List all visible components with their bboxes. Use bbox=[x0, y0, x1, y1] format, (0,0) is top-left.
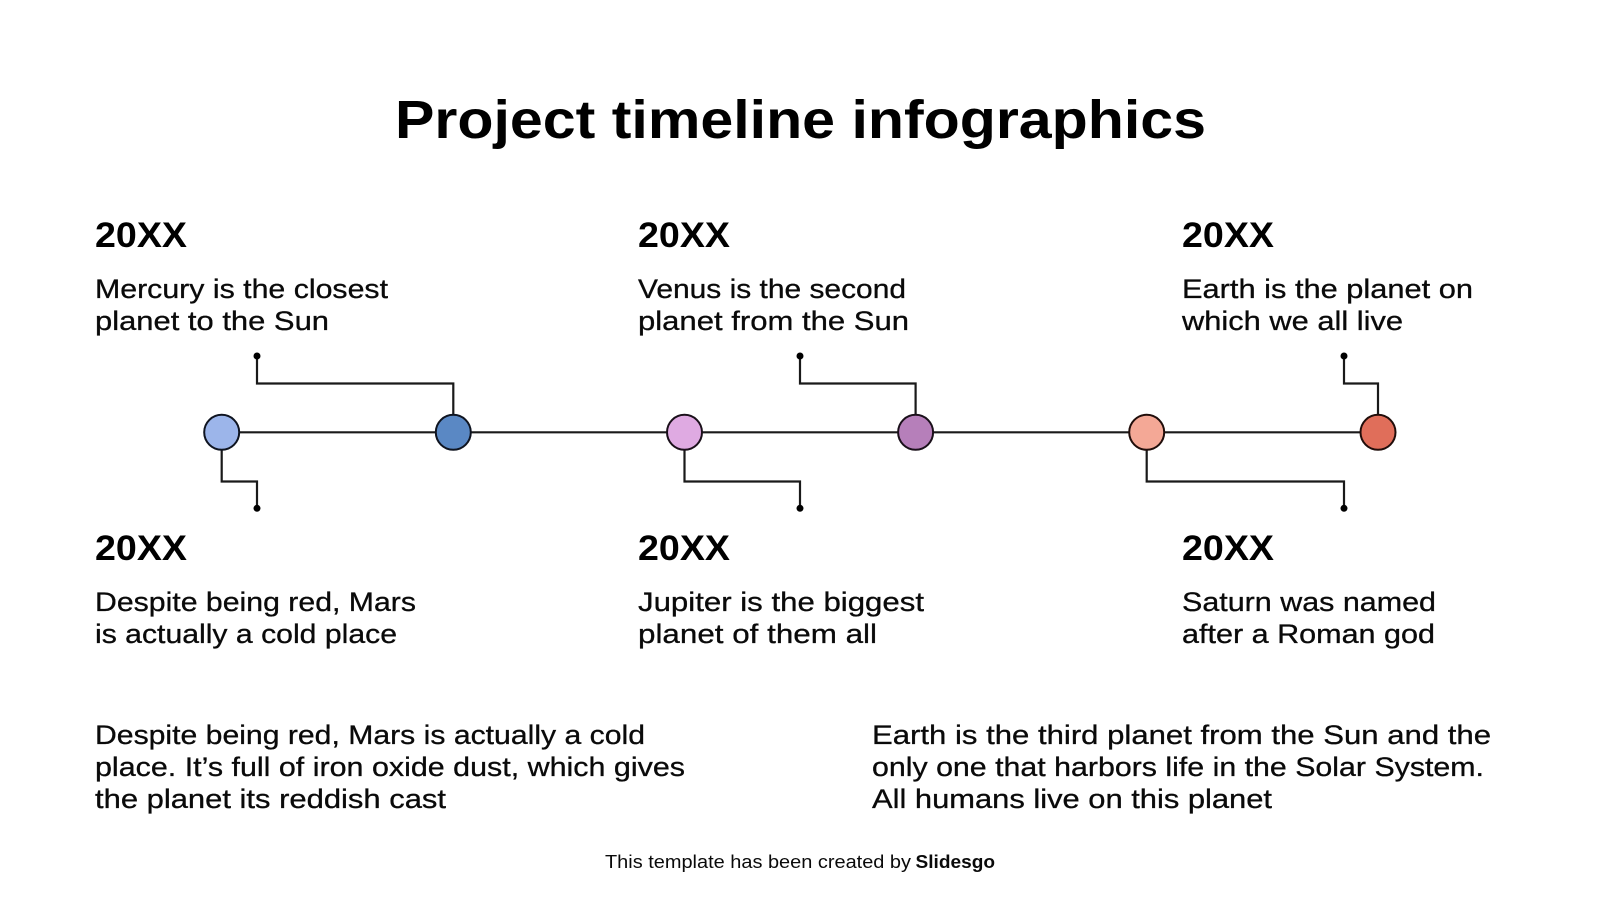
Mercury year: 20XX bbox=[95, 216, 188, 255]
Venus year: 20XX bbox=[638, 216, 731, 255]
Saturn description: after a Roman god bbox=[1182, 619, 1435, 649]
node: light blue bbox=[204, 415, 239, 450]
text block: Mars paragraph: Despite being red, Mars is actually a cold bbox=[95, 720, 645, 750]
Jupiter description bbox=[638, 587, 925, 649]
text block: Earth paragraph bbox=[872, 720, 1491, 814]
Mercury description: Mercury is the closest bbox=[95, 274, 389, 304]
Saturn year: 20XX bbox=[1182, 529, 1275, 568]
panel: Jupiter milestone bbox=[638, 529, 925, 649]
Mercury description: planet to the Sun bbox=[95, 306, 329, 336]
node: blue bbox=[436, 415, 471, 450]
Mars year: 20XX bbox=[95, 529, 188, 568]
connector: salmon node to Saturn bbox=[1147, 450, 1348, 512]
node: red bbox=[1360, 415, 1396, 450]
Saturn description: Saturn was named bbox=[1182, 587, 1436, 617]
footer credit: This template has been created by bbox=[605, 852, 911, 872]
node: salmon bbox=[1129, 415, 1164, 450]
connector: Earth to red node bbox=[1340, 352, 1378, 414]
Mars description: Despite being red, Mars bbox=[95, 587, 416, 617]
connector: Mercury to blue node bbox=[254, 352, 453, 414]
Earth description: which we all live bbox=[1181, 306, 1403, 336]
node: purple bbox=[898, 415, 933, 450]
node: lilac bbox=[667, 415, 702, 450]
connector: light blue node to Mars bbox=[222, 450, 260, 512]
text block: Earth paragraph: only one that harbors life in the Solar System. bbox=[872, 752, 1484, 782]
Earth description bbox=[1181, 274, 1473, 336]
text block: Mars paragraph: the planet its reddish cast bbox=[95, 784, 447, 814]
connector: Venus to purple node bbox=[796, 352, 916, 414]
Venus description bbox=[638, 274, 909, 336]
Jupiter year: 20XX bbox=[638, 529, 731, 568]
title: Project timeline infographics bbox=[395, 90, 1206, 150]
Venus description: Venus is the second bbox=[638, 274, 906, 304]
text block: Mars paragraph bbox=[95, 720, 685, 814]
panel: Saturn milestone bbox=[1182, 529, 1436, 649]
text block: Earth paragraph: All humans live on this planet bbox=[872, 784, 1273, 814]
panel: Earth milestone bbox=[1181, 216, 1473, 336]
Mercury description bbox=[95, 274, 389, 336]
text block: Earth paragraph: Earth is the third planet from the Sun and the bbox=[872, 720, 1491, 750]
Saturn description bbox=[1182, 587, 1436, 649]
timeline axis bbox=[222, 431, 1378, 433]
connector: lilac node to Jupiter bbox=[684, 450, 804, 512]
Mars description: is actually a cold place bbox=[95, 619, 397, 649]
Jupiter description: planet of them all bbox=[638, 619, 877, 649]
panel: Mars milestone bbox=[95, 529, 416, 649]
panel: Mercury milestone bbox=[95, 216, 389, 336]
Mars description bbox=[95, 587, 416, 649]
Earth description: Earth is the planet on bbox=[1182, 274, 1473, 304]
panel: Venus milestone bbox=[638, 216, 909, 336]
Venus description: planet from the Sun bbox=[638, 306, 909, 336]
text block: Mars paragraph: place. It’s full of iron oxide dust, which gives bbox=[95, 752, 685, 782]
footer credit: Slidesgo bbox=[916, 852, 995, 872]
Earth year: 20XX bbox=[1182, 216, 1275, 255]
Jupiter description: Jupiter is the biggest bbox=[638, 587, 925, 617]
